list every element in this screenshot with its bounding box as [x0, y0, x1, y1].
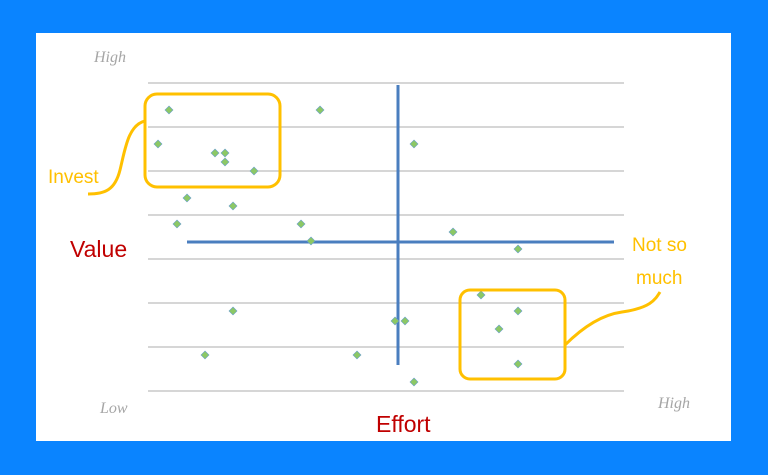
label: not so much: much — [636, 268, 682, 289]
axis title: effort: Effort — [376, 411, 431, 437]
axis label: low: Low — [99, 400, 128, 417]
label: invest: Invest — [48, 167, 99, 188]
axis: horizontal value divider — [187, 240, 614, 244]
label: not so much: Not so — [632, 235, 687, 256]
label: not so much — [632, 235, 687, 289]
callout: invest box — [88, 94, 280, 194]
data points — [154, 106, 522, 386]
callout: not so much box — [460, 290, 660, 379]
axis title: value: Value — [70, 236, 127, 262]
axis label: high value: High — [93, 49, 126, 66]
axis: vertical effort divider — [396, 85, 400, 365]
panel: chart — [36, 33, 731, 441]
axis label: high effort: High — [657, 395, 690, 412]
